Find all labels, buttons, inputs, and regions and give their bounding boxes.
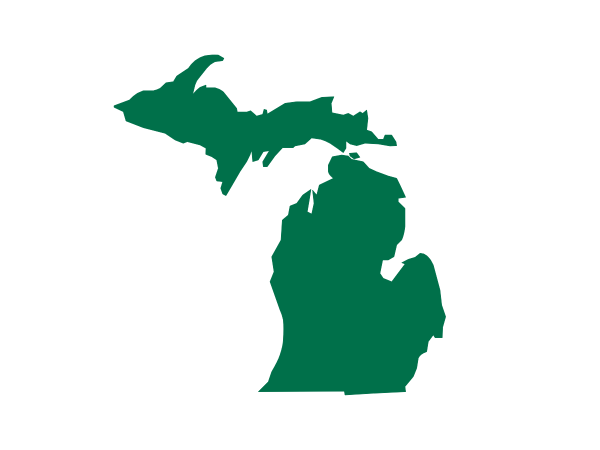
island: Bois Blanc [349, 153, 360, 159]
upper peninsula [114, 55, 397, 196]
lower peninsula [258, 155, 446, 395]
